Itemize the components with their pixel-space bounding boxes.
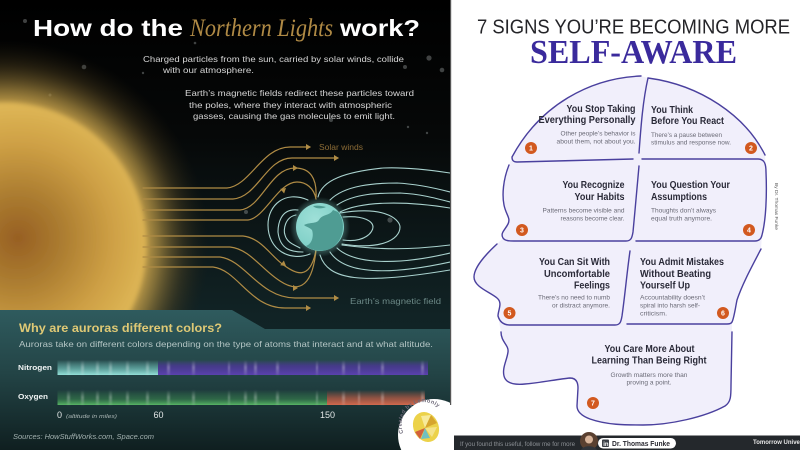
- label: earth's magnetic field: Earth’s magnetic field: [350, 296, 441, 306]
- cell 4: 4: [747, 228, 751, 234]
- badge: created by lemonly: [398, 399, 450, 450]
- text block: intro: [143, 54, 414, 121]
- cell 5: You Can Sit With: [539, 257, 610, 268]
- cell 5: Feelings: [574, 280, 610, 292]
- solar wind lines: [143, 147, 338, 308]
- bar: oxygen: [58, 390, 425, 405]
- cell 5: or distract anymore.: [552, 302, 610, 310]
- sun: [0, 50, 198, 310]
- cell 2: Before You React: [651, 116, 725, 127]
- sources: Sources: HowStuffWorks.com, Space.com: [13, 432, 154, 441]
- title: work?: [339, 15, 420, 41]
- icon: lemon: [412, 412, 440, 442]
- panel: northern lights: [0, 0, 450, 450]
- cell 6: criticism.: [640, 310, 667, 318]
- solar wind arrowheads: [280, 144, 339, 311]
- head diagram: [474, 76, 766, 425]
- cell 3: [502, 165, 639, 241]
- cell 4: Assumptions: [651, 192, 707, 203]
- footer bar: If you found this useful, follow me for more: [460, 441, 575, 448]
- label: nitrogen: Nitrogen: [18, 363, 52, 372]
- cell 7: Growth matters more than: [610, 372, 688, 379]
- axis labels: [57, 412, 335, 419]
- heading: Why are auroras different colors?: [19, 321, 222, 335]
- cell 6: Yourself Up: [640, 280, 690, 292]
- cell 1: about them, not about you.: [556, 138, 636, 146]
- byline: By Dr. Thomas Funke: [774, 183, 779, 231]
- cell 2: There’s a pause between: [651, 132, 722, 139]
- cell 4: You Question Your: [651, 180, 730, 191]
- icon: earth: [290, 197, 350, 257]
- axis labels: 0: [57, 410, 62, 420]
- cell 7: proving a point.: [626, 380, 672, 386]
- avatar: [580, 432, 598, 450]
- cell 6: Accountability doesn’t: [640, 294, 705, 302]
- cell 7: Learning Than Being Right: [592, 356, 707, 366]
- subheading: Auroras take on different colors depending on the type of atoms that interact and at what altitude.: [19, 339, 433, 349]
- cell 7: 7: [591, 400, 595, 408]
- text block: intro: the poles, where they interact with atmospheric: [189, 100, 393, 110]
- cell 2: stimulus and response now.: [651, 140, 731, 146]
- cell 5: There’s no need to numb: [538, 294, 610, 302]
- text block: intro: gasses, causing the gas molecules to emit light.: [193, 111, 395, 121]
- title: How do the: [33, 15, 183, 41]
- cell 2: [639, 78, 765, 155]
- name pill: Dr. Thomas Funke: [612, 439, 670, 448]
- axis labels: 150: [320, 410, 335, 420]
- cell 2: You Think: [651, 105, 693, 116]
- cell 3: Your Habits: [574, 192, 625, 203]
- cell 3: 3: [520, 228, 524, 234]
- footer bar: [454, 432, 800, 450]
- title: [34, 18, 418, 42]
- cell 4: [636, 159, 766, 241]
- heading: self-aware: SELF-AWARE: [530, 34, 737, 71]
- cell 4: Thoughts don’t always: [651, 208, 717, 214]
- text block: intro: Earth’s magnetic fields redirect these particles toward: [185, 88, 414, 98]
- name pill: [598, 438, 676, 448]
- text block: intro: with our atmosphere.: [162, 65, 254, 75]
- axis labels: (altitude in miles): [66, 414, 117, 420]
- title: Northern Lights: [189, 15, 333, 42]
- cell 1: 1: [529, 146, 533, 152]
- cell 1: Other people’s behavior is: [560, 130, 636, 138]
- cell 6: [627, 249, 761, 324]
- cell 5: [474, 244, 630, 325]
- cell 3: Patterns become visible and: [542, 208, 625, 214]
- magnetic field lines: [268, 168, 450, 278]
- cell 5: Uncomfortable: [544, 269, 610, 280]
- axis labels: 60: [154, 410, 164, 420]
- stars: [23, 19, 444, 223]
- cell 1: [512, 76, 641, 162]
- badge: created by lemonly: Created by Lemonly: [398, 399, 440, 434]
- panel: self-aware: [450, 0, 800, 450]
- cell 1: You Stop Taking: [566, 104, 636, 115]
- cell 6: You Admit Mistakes: [640, 257, 724, 268]
- cell 3: You Recognize: [562, 180, 625, 191]
- cell 6: 6: [721, 310, 725, 318]
- cell 2: 2: [749, 146, 753, 152]
- text block: intro: Charged particles from the sun, carried by solar winds, collide: [143, 54, 404, 64]
- label: oxygen: Oxygen: [18, 392, 48, 401]
- head background: [474, 76, 766, 425]
- cell 7: [501, 332, 732, 425]
- panel: auroras: [0, 310, 450, 450]
- cell 4: equal truth anymore.: [651, 216, 712, 222]
- bar: nitrogen: [58, 360, 428, 375]
- name pill: in: [603, 442, 609, 448]
- label: solar winds: Solar winds: [319, 143, 363, 152]
- cell 5: 5: [508, 310, 512, 318]
- cell 1: Everything Personally: [538, 115, 636, 126]
- cell 6: Without Beating: [640, 269, 711, 280]
- cell 6: spiral into harsh self-: [640, 302, 700, 310]
- cell 3: reasons become clear.: [560, 216, 625, 222]
- cell 7: You Care More About: [604, 344, 695, 355]
